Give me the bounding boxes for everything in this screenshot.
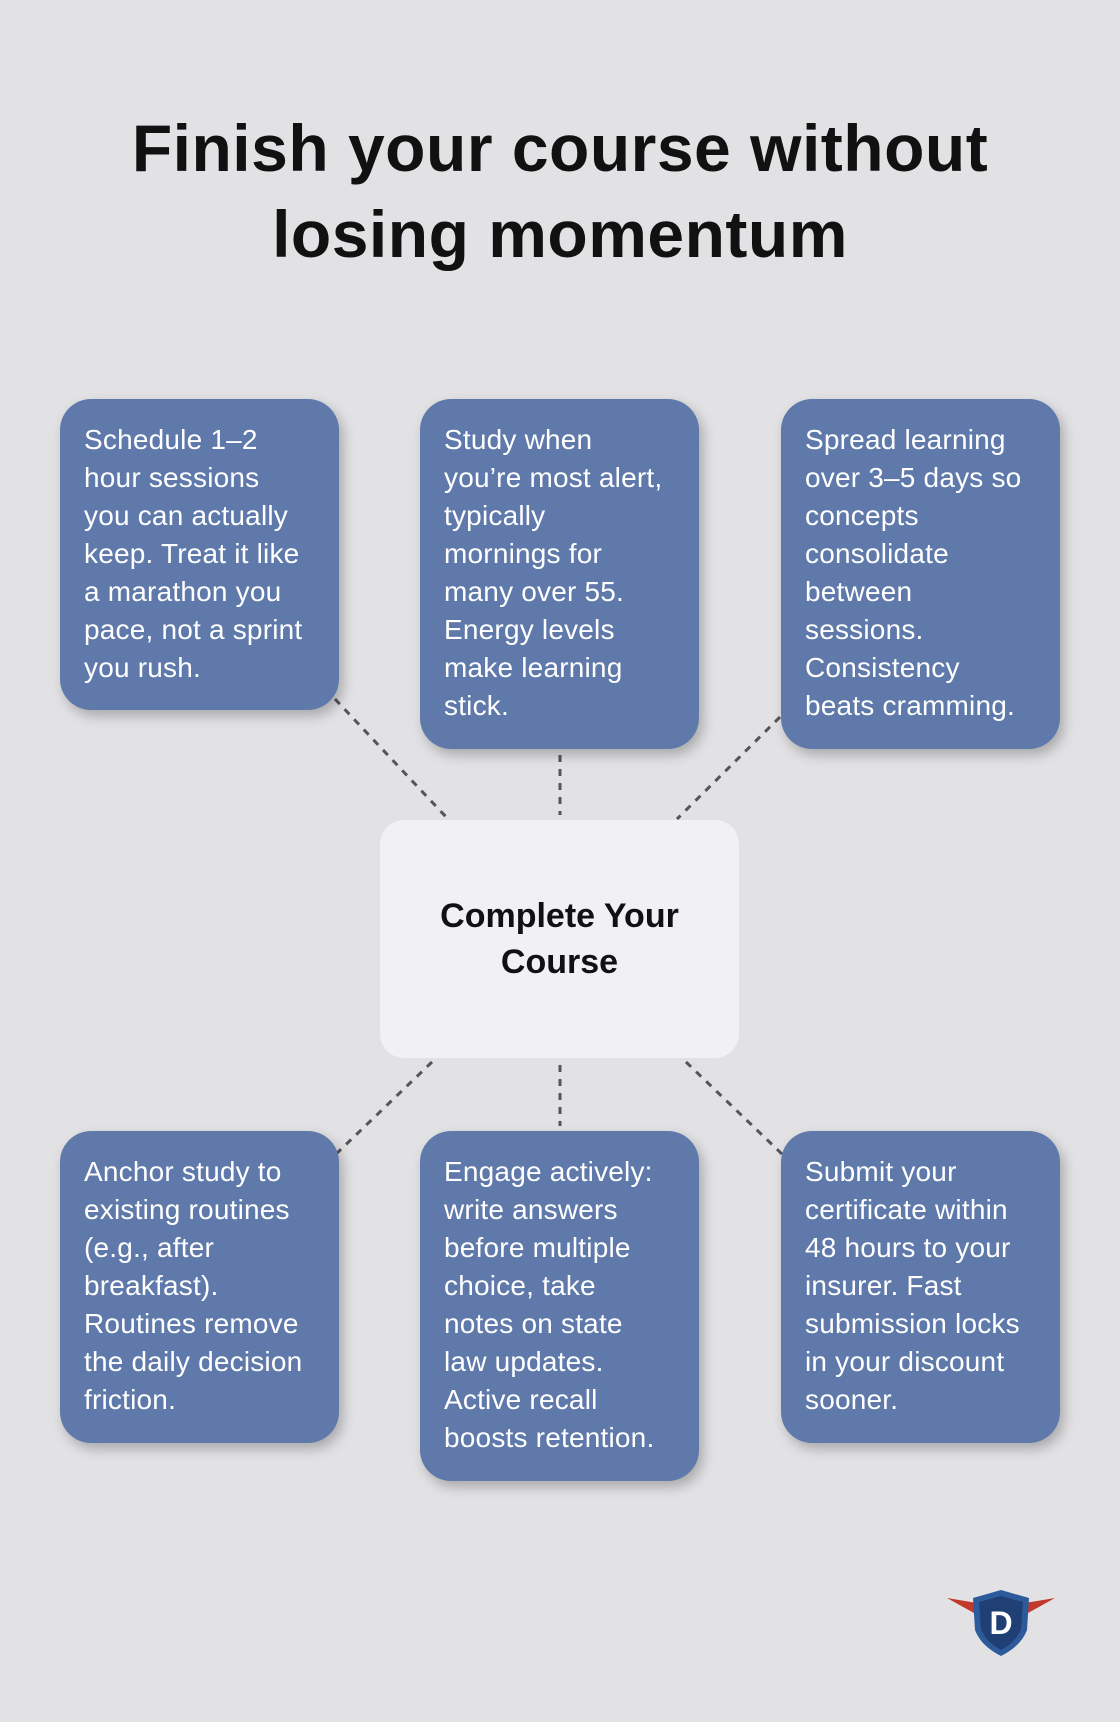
box: engage actively: before multiple [444,1232,631,1263]
box: engage actively: write answers [444,1194,618,1225]
box: spread learning [781,399,1060,749]
title [132,111,988,271]
box: submit certificate: in your discount [805,1346,1004,1377]
box: submit certificate [781,1131,1060,1443]
box: schedule sessions: hour sessions [84,462,259,493]
box: schedule sessions: you rush. [84,652,201,683]
box: anchor study: Anchor study to [84,1156,282,1187]
box: schedule sessions: keep. Treat it like [84,538,299,569]
box: anchor study: the daily decision [84,1346,302,1377]
box: anchor study: existing routines [84,1194,290,1225]
box: spread learning: consolidate [805,538,949,569]
box: study when alert: make learning [444,652,622,683]
box: spread learning: beats cramming. [805,690,1015,721]
icon: logo shield: D [989,1605,1013,1641]
box: engage actively: law updates. [444,1346,604,1377]
box: schedule sessions: Schedule 1–2 [84,424,258,455]
box: schedule sessions [60,399,339,710]
center: complete your course: Course [501,943,618,981]
center: complete your course: Complete Your [440,897,679,935]
box: study when alert: typically [444,500,545,531]
box: spread learning: between [805,576,912,607]
box: submit certificate: insurer. Fast [805,1270,962,1301]
box: study when alert: Study when [444,424,592,455]
box: anchor study: (e.g., after [84,1232,214,1263]
box: anchor study: Routines remove [84,1308,299,1339]
box: schedule sessions: pace, not a sprint [84,614,302,645]
box: spread learning: Consistency [805,652,960,683]
icon: logo shield [947,1590,1055,1656]
box: spread learning: over 3–5 days so [805,462,1021,493]
title: Finish your course without [132,111,988,185]
box: submit certificate: 48 hours to your [805,1232,1011,1263]
box: spread learning: concepts [805,500,919,531]
box: spread learning: sessions. [805,614,924,645]
box: study when alert: mornings for [444,538,602,569]
box: schedule sessions: a marathon you [84,576,281,607]
box: engage actively: notes on state [444,1308,623,1339]
box: study when alert: stick. [444,690,509,721]
box: engage actively: Engage actively: [444,1156,653,1187]
box: engage actively: choice, take [444,1270,596,1301]
box: submit certificate: certificate within [805,1194,1008,1225]
box: spread learning: Spread learning [805,424,1006,455]
box: anchor study [60,1131,339,1443]
box: engage actively [420,1131,699,1481]
box: engage actively: boosts retention. [444,1422,654,1453]
box: engage actively: Active recall [444,1384,598,1415]
box: submit certificate: submission locks [805,1308,1020,1339]
box: study when alert [420,399,699,749]
box: study when alert: you’re most alert, [444,462,662,493]
box: study when alert: Energy levels [444,614,615,645]
center: complete your course [380,820,739,1058]
box: anchor study: friction. [84,1384,176,1415]
box: submit certificate: sooner. [805,1384,898,1415]
title: losing momentum [272,197,848,271]
box: study when alert: many over 55. [444,576,624,607]
box: submit certificate: Submit your [805,1156,957,1187]
box: anchor study: breakfast). [84,1270,218,1301]
box: schedule sessions: you can actually [84,500,288,531]
